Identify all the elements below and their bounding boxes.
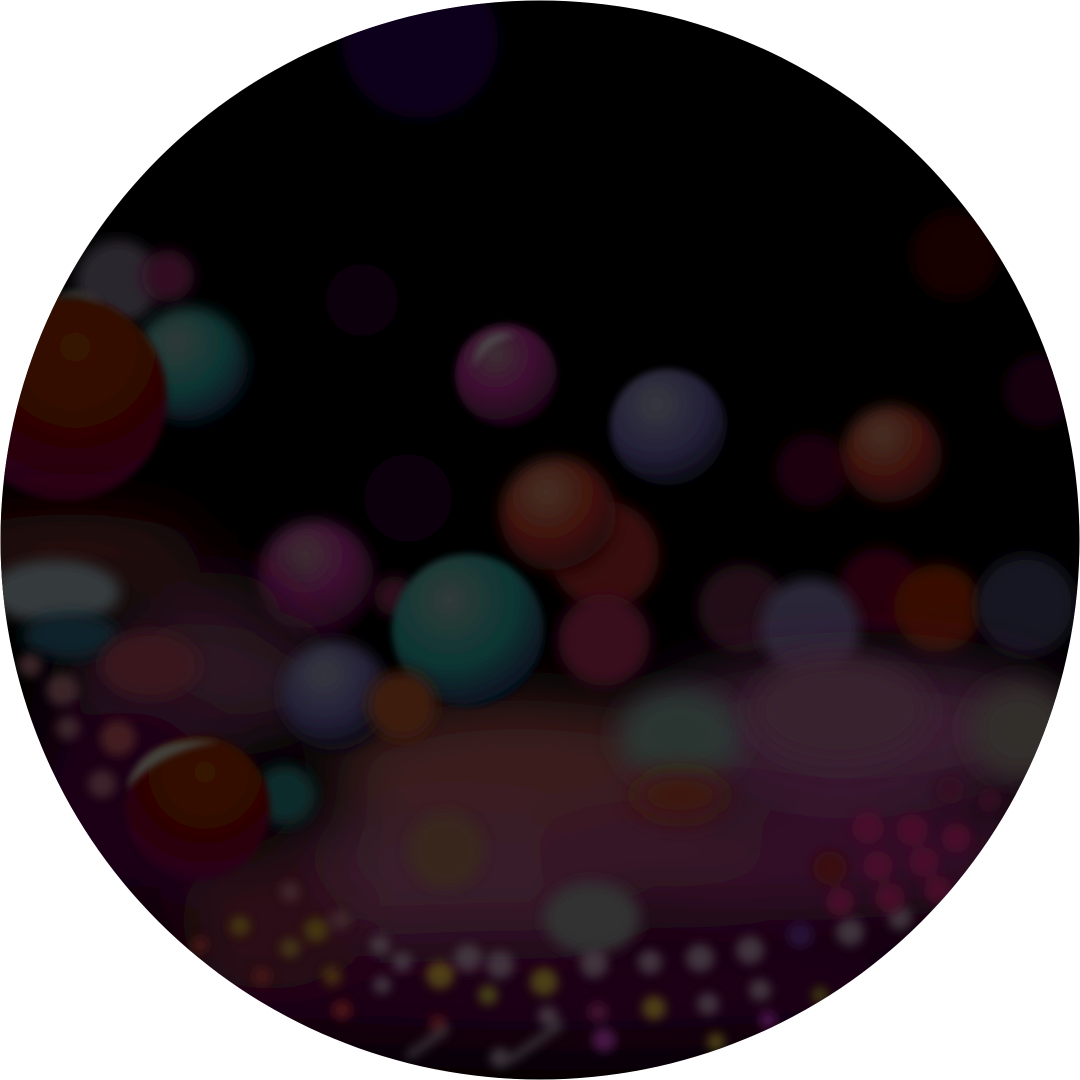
beads: lower left xyxy=(18,653,352,1020)
lower magenta haze xyxy=(0,514,1080,1050)
beads: lower centre xyxy=(370,906,912,1068)
mid spheres xyxy=(258,324,1076,678)
foreground spheres xyxy=(0,554,1070,954)
background spheres xyxy=(76,0,1076,542)
beads: lower right xyxy=(813,776,1002,916)
left large spheres xyxy=(0,290,248,500)
